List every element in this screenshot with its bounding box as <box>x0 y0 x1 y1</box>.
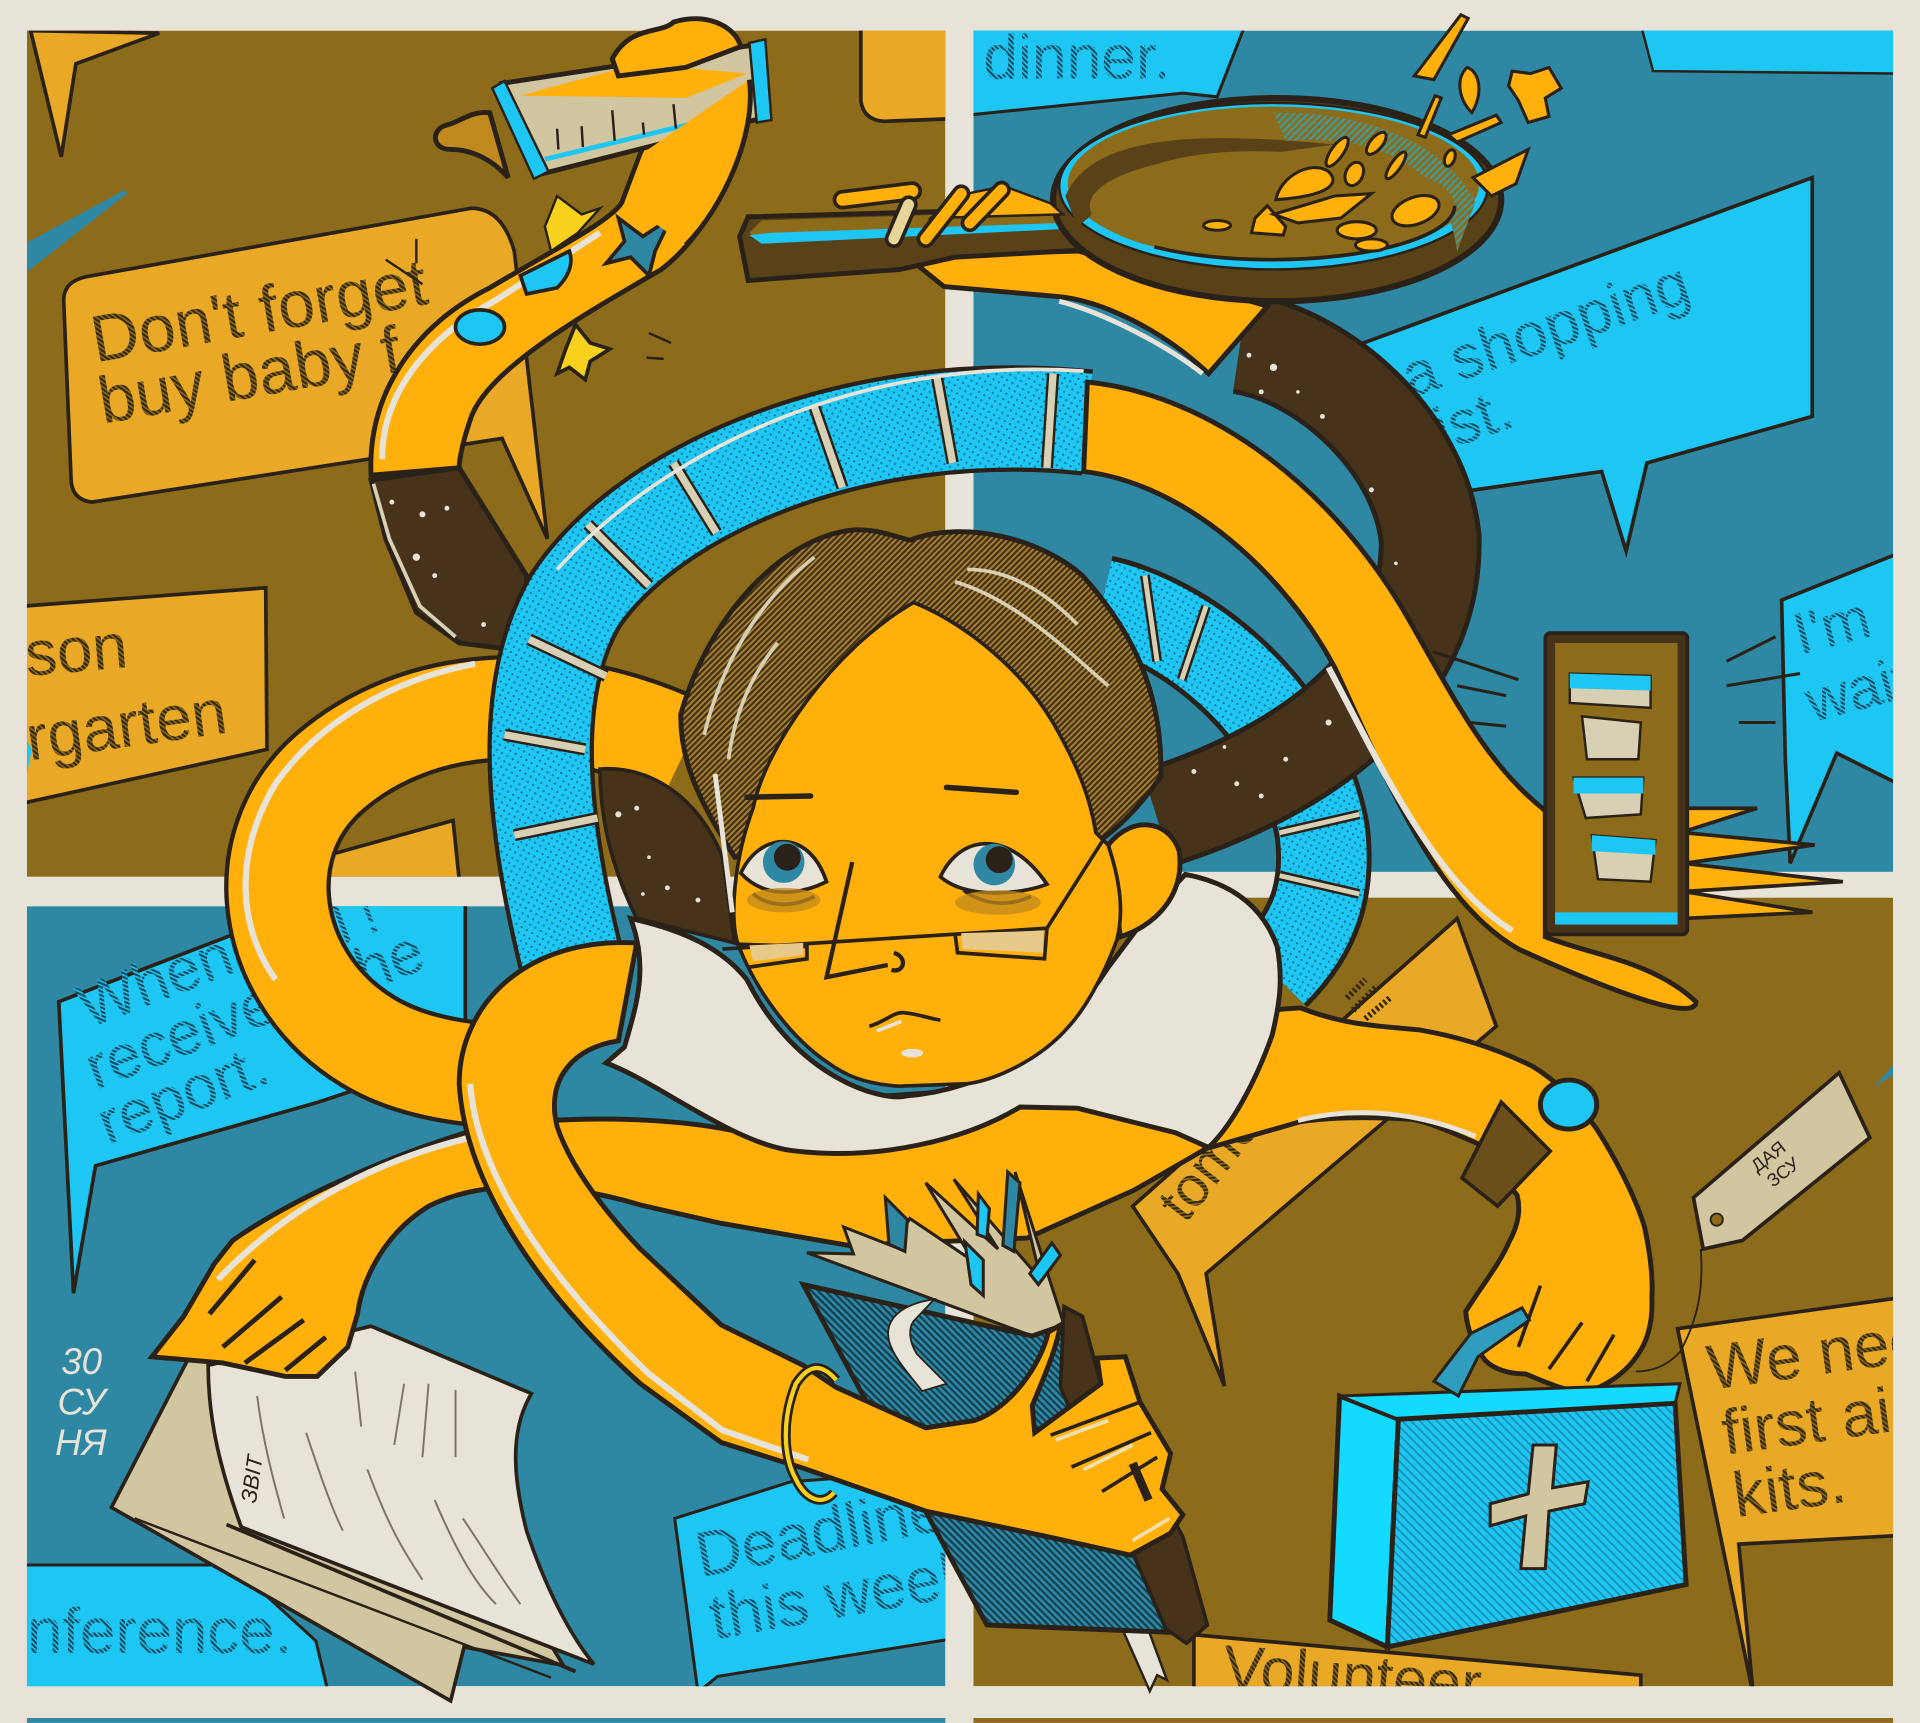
star yellow top <box>545 196 600 251</box>
under-eye shadows <box>747 888 1041 915</box>
signature: СУ <box>58 1381 109 1422</box>
nose <box>827 862 903 977</box>
arm: large lower arm with pen <box>459 943 1183 1555</box>
watch strap <box>1462 1102 1550 1206</box>
speech bubble: report: ill ! <box>304 884 387 964</box>
document <box>111 1326 594 1701</box>
speech bubble: deadline <box>673 1478 946 1686</box>
glasses <box>722 834 1107 967</box>
speech bubble: report: report. <box>88 1030 278 1157</box>
tattoo spot <box>456 310 504 344</box>
next illustration strip at bottom <box>27 1718 1893 1723</box>
luggage tag <box>1636 1073 1870 1372</box>
face <box>734 603 1121 1086</box>
speech bubble: first aid kits <box>1675 1296 1894 1686</box>
speech bubble: conference: nference. <box>27 1596 292 1667</box>
head <box>681 530 1180 1086</box>
speech bubble: corner fragment <box>321 820 459 879</box>
notebook <box>803 1172 1207 1691</box>
left pigtail <box>600 769 735 943</box>
hair <box>681 530 1161 857</box>
speech bubble: dinner: dinner. <box>983 22 1171 92</box>
fingers <box>1051 1402 1157 1492</box>
speech bubble: kindergarten <box>21 588 267 803</box>
shirt <box>606 874 1280 1153</box>
speech bubble: baby food: Don't forget <box>85 245 433 377</box>
speech bubble: shopping list: list. <box>1412 374 1521 468</box>
kit handle <box>1434 1308 1529 1396</box>
speech bubble: top right corner <box>1641 30 1894 75</box>
speech bubble: deadline: this week <box>704 1537 978 1653</box>
signature: 30 <box>61 1341 103 1382</box>
accent stroke <box>1873 1065 1893 1087</box>
speech bubble: deadline: Deadline <box>690 1473 950 1591</box>
arm: large blue striped sleeve <box>504 369 1087 967</box>
speech bubble: volunteer <box>1192 1634 1643 1686</box>
fanned pages <box>807 1172 1064 1336</box>
pen <box>1117 1610 1167 1691</box>
speech bubble tail: top left <box>31 31 159 157</box>
pan handle <box>740 208 1085 280</box>
chat messages <box>1570 674 1651 708</box>
speech bubble: waiting: I'm <box>1787 585 1877 668</box>
arm: holding frying pan <box>740 15 1561 374</box>
eyebrows <box>747 787 1016 797</box>
speech bubble: tomorrow: tomorrow <box>1145 1008 1339 1232</box>
motion lines <box>1433 637 1800 726</box>
signature <box>56 1348 108 1455</box>
speech bubble: volunteer: Volunteer <box>1221 1633 1484 1718</box>
kit side <box>1330 1396 1398 1647</box>
tattoo tooth <box>520 251 571 294</box>
speech bubble: report: receive <box>76 968 284 1102</box>
speech bubble: report: When <box>68 920 242 1041</box>
motion ticks <box>386 239 671 359</box>
first aid kit <box>1330 1308 1686 1647</box>
watch face <box>1540 1080 1597 1129</box>
speech bubble: top right corner <box>861 25 949 121</box>
luggage tag: ЗСУ <box>1763 1153 1804 1191</box>
page tabs <box>885 1172 1060 1296</box>
kit top <box>1340 1384 1680 1419</box>
baby bottle <box>435 19 771 245</box>
hair highlights <box>704 557 1108 759</box>
speech bubble: kindergarten: rgarten <box>21 676 231 774</box>
hand on bottle <box>612 19 750 245</box>
cover <box>803 1285 1171 1632</box>
speech bubble: waiting <box>1780 554 1894 864</box>
hand on handle <box>842 186 1063 239</box>
star teal <box>606 218 671 276</box>
left eye <box>741 841 827 904</box>
speech bubble: report: he <box>345 916 433 1004</box>
spine <box>1060 1307 1207 1643</box>
cross <box>1490 1445 1588 1569</box>
phone <box>1545 633 1687 934</box>
arm: upper left with star tattoos <box>371 86 748 652</box>
fingers <box>1680 808 1843 918</box>
panel: top right <box>967 22 1920 872</box>
arm: right with watch <box>1206 1008 1652 1392</box>
ring <box>1133 1463 1149 1500</box>
speech bubble: dinner <box>967 22 1245 115</box>
speech bubble: kindergarten: son <box>22 610 130 690</box>
bookmark <box>888 1299 947 1391</box>
arm: left loop <box>246 664 686 1076</box>
speech bubble: shopping list: a shopping <box>1393 248 1698 410</box>
speech bubble: conference <box>22 1565 328 1692</box>
frying pan <box>1053 98 1501 301</box>
luggage tag: ДАЯ <box>1747 1136 1790 1176</box>
cheek highlight <box>715 774 732 912</box>
food in pan <box>1204 129 1457 251</box>
bracelet <box>786 1368 836 1500</box>
arm: phone arm <box>1084 382 1843 1008</box>
arm: holding document <box>152 1078 1206 1376</box>
speech bubble: tomorrow <box>1133 918 1496 1386</box>
signature: НЯ <box>55 1422 108 1463</box>
panel: top left <box>21 25 949 879</box>
document: ЗВІТ <box>236 1452 268 1504</box>
speech bubble: report <box>56 906 468 1294</box>
ear <box>1108 825 1180 937</box>
kit front <box>1387 1403 1686 1647</box>
right eye <box>940 844 1047 903</box>
speech bubble: shopping list <box>1347 178 1812 551</box>
star yellow hanging <box>557 325 610 380</box>
speech bubble: baby food: buy baby f <box>93 313 406 439</box>
panel: bottom left <box>26 906 946 1686</box>
panel: bottom right <box>973 898 1920 1718</box>
accent stroke <box>27 190 127 272</box>
arm: dark sleeve behind head <box>1157 343 1430 818</box>
arm: striped sleeve behind head <box>1102 576 1359 974</box>
mouth <box>869 1013 940 1057</box>
flying food <box>1414 15 1561 196</box>
speech bubble: first aid kits: kits. <box>1728 1445 1850 1531</box>
speech bubble: baby food <box>64 208 547 539</box>
